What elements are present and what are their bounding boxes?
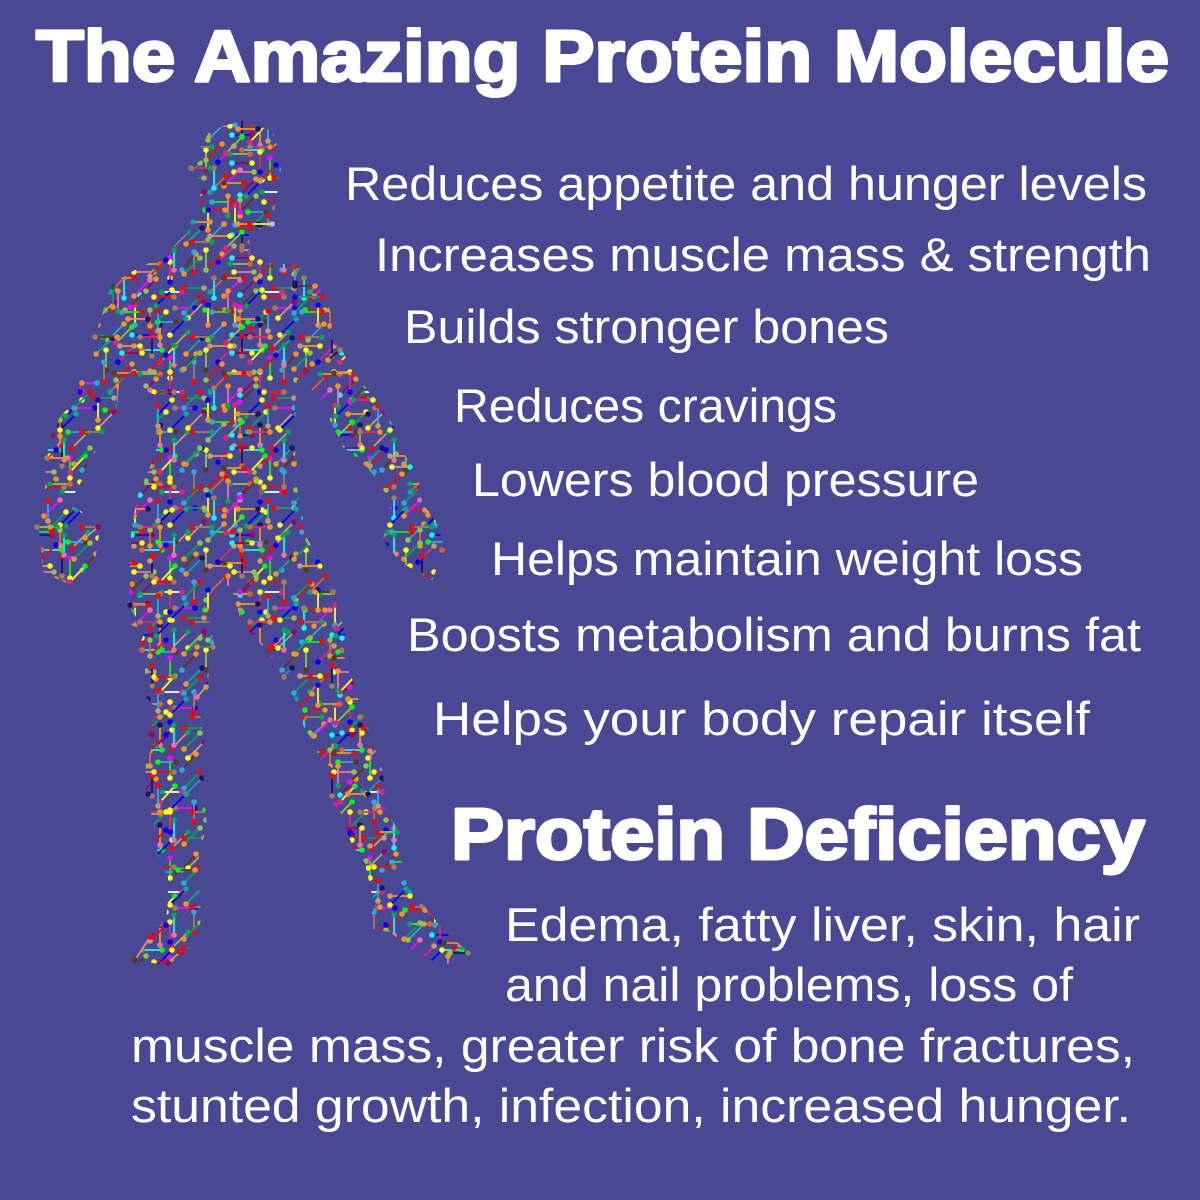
deficiency text block: muscle mass, greater risk of bone fractures, bbox=[131, 1019, 1135, 1072]
title: The Amazing Protein Molecule bbox=[36, 17, 1169, 97]
deficiency text block bbox=[131, 898, 1140, 1132]
benefit: appetite: Reduces appetite and hunger levels bbox=[345, 157, 1147, 210]
benefit: blood pressure: Lowers blood pressure bbox=[472, 453, 979, 506]
heading: protein deficiency: Protein Deficiency bbox=[451, 795, 1145, 875]
benefit: bones: Builds stronger bones bbox=[404, 300, 889, 353]
benefit: metabolism: Boosts metabolism and burns fat bbox=[407, 608, 1141, 661]
benefit: weight loss: Helps maintain weight loss bbox=[491, 532, 1083, 585]
deficiency text block: Edema, fatty liver, skin, hair bbox=[505, 898, 1140, 951]
deficiency text block: and nail problems, loss of bbox=[505, 958, 1074, 1011]
benefit: muscle: Increases muscle mass & strength bbox=[375, 228, 1151, 281]
benefit: cravings: Reduces cravings bbox=[454, 379, 837, 432]
deficiency text block: stunted growth, infection, increased hunger. bbox=[131, 1079, 1131, 1132]
benefit: repair: Helps your body repair itself bbox=[433, 692, 1091, 745]
illustration: human body made of protein molecules bbox=[30, 115, 475, 970]
